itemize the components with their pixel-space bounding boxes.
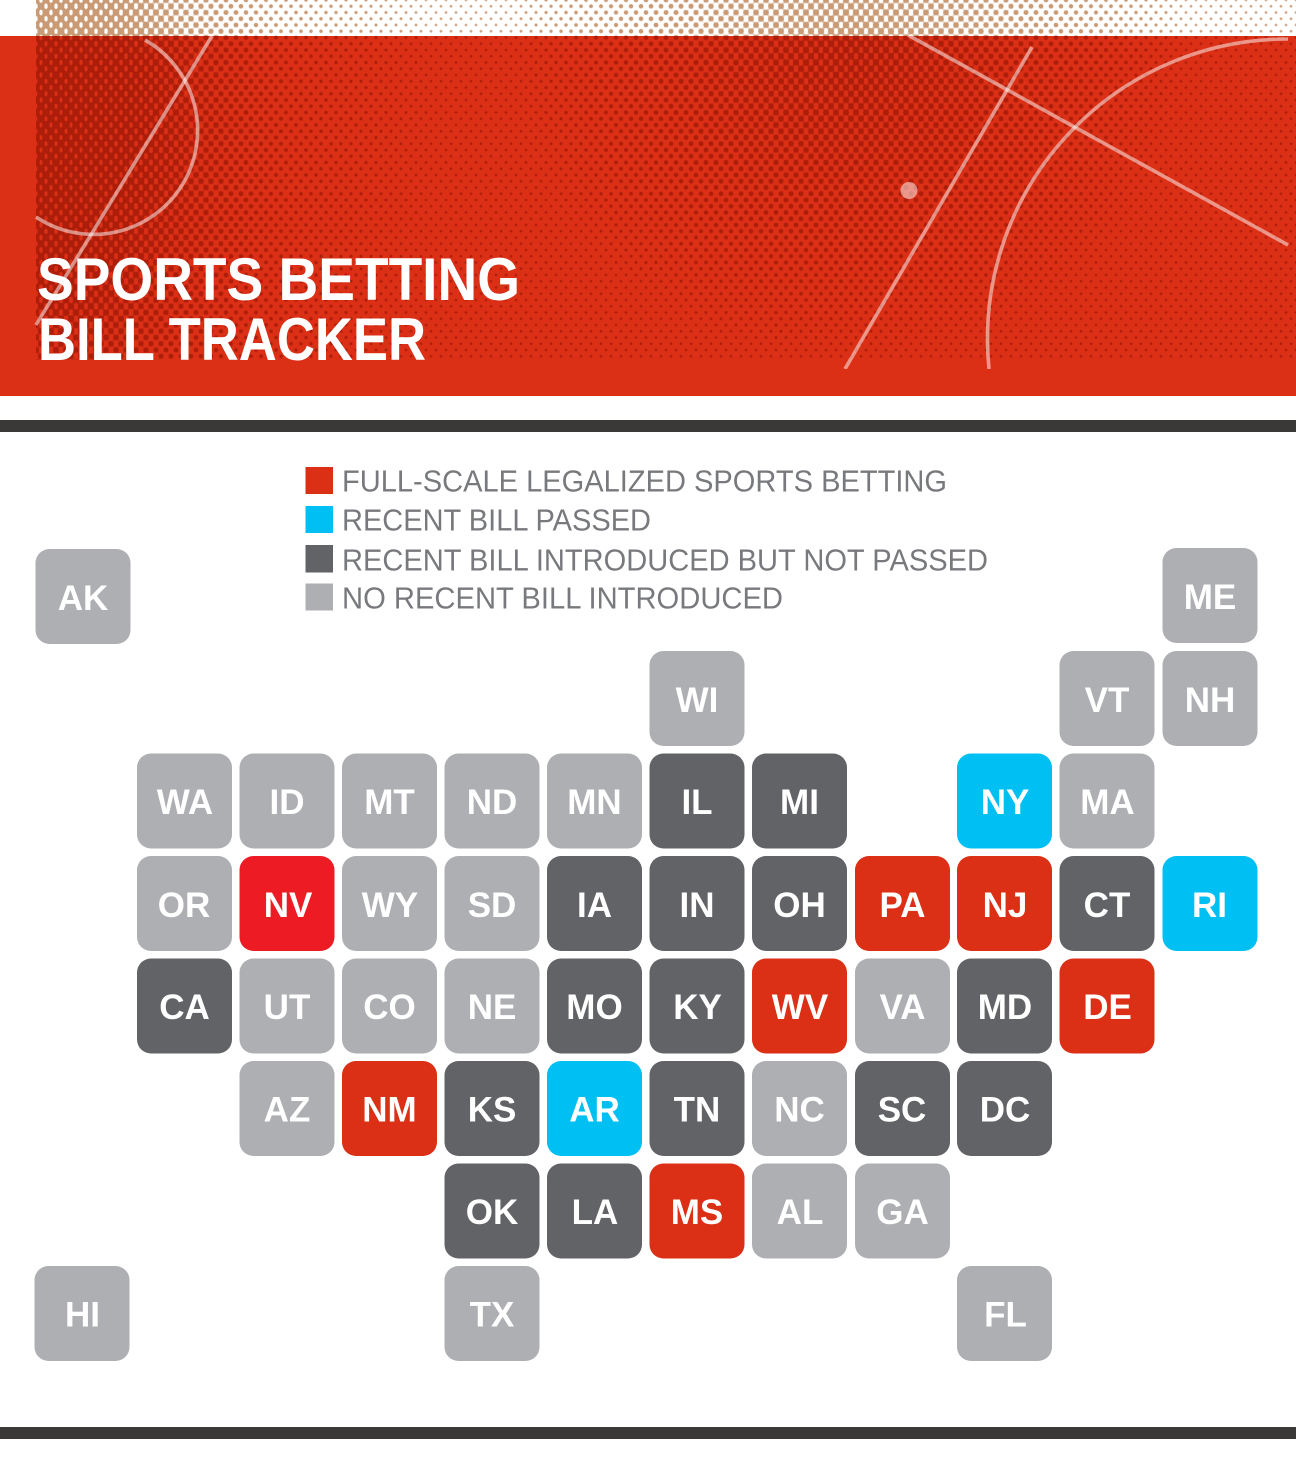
tile: MI: MI (780, 783, 819, 822)
tile: ND: ND (467, 783, 517, 822)
tile: NV (240, 856, 334, 951)
tile: CO: CO (363, 988, 416, 1027)
halftone dot texture (36, 0, 1296, 360)
tile: KS (444, 1061, 540, 1156)
tile: OH (752, 856, 847, 951)
state tile map (34, 548, 1258, 1361)
tile: VA (855, 958, 950, 1054)
tile: TX: TX (470, 1296, 515, 1334)
tile: VA: VA (879, 988, 926, 1027)
tile: GA (855, 1164, 950, 1258)
tile: DC: DC (980, 1090, 1030, 1130)
tile: MT (342, 754, 437, 848)
tile: NY (957, 754, 1052, 848)
tile: OK: OK (466, 1193, 518, 1232)
tile: NY: NY (981, 783, 1029, 822)
bottom divider bar (0, 1427, 1296, 1439)
tile: ID (240, 754, 334, 848)
tile: WA (137, 754, 232, 848)
title: BILL TRACKER (38, 306, 426, 373)
tile: HI: HI (65, 1296, 100, 1334)
tile: IA: IA (577, 886, 612, 925)
tile: OH: OH (773, 886, 826, 925)
court lines (36, 35, 1288, 369)
tile: LA (547, 1164, 642, 1258)
tile: NM: NM (362, 1090, 417, 1130)
tile: MI (752, 754, 847, 848)
tile: DC (957, 1061, 1052, 1156)
tile: OR (137, 856, 232, 951)
tile: IN (650, 856, 744, 951)
tile: SC: SC (878, 1090, 926, 1130)
tile: TN (650, 1061, 744, 1156)
tile: NJ: NJ (983, 886, 1027, 925)
tile: IN: IN (680, 886, 714, 925)
tile: NC: NC (774, 1090, 825, 1130)
legend item: recent bill passed: RECENT BILL PASSED (342, 502, 651, 538)
tile: AK (36, 549, 130, 644)
tile: AL: AL (777, 1193, 823, 1232)
tile: IL: IL (681, 783, 713, 822)
tile: LA: LA (572, 1193, 618, 1232)
tile: NJ (957, 856, 1052, 951)
top divider bar (0, 420, 1296, 432)
tile: UT (240, 958, 334, 1054)
tile: DE: DE (1083, 988, 1132, 1027)
tile: SD: SD (468, 886, 516, 925)
tile: CT: CT (1084, 886, 1130, 925)
tile: MD (957, 958, 1052, 1054)
tile: TN: TN (674, 1090, 720, 1130)
tile: MT: MT (364, 783, 415, 822)
tile: HI (34, 1266, 130, 1361)
title: SPORTS BETTING (37, 246, 520, 313)
tile: AZ (240, 1061, 334, 1156)
tile: NM (342, 1061, 437, 1156)
tile: PA: PA (879, 886, 926, 925)
tile: IA (547, 856, 642, 951)
tile: MA (1060, 754, 1154, 848)
tile: SD (444, 856, 540, 951)
tile: NC (752, 1061, 847, 1156)
tile: WV (752, 958, 847, 1054)
tile: AR (547, 1061, 642, 1156)
tile: TX (444, 1266, 540, 1361)
tile: FL: FL (984, 1296, 1027, 1334)
tile: KS: KS (468, 1090, 516, 1130)
tile: WY: WY (362, 886, 418, 925)
tile: AL (752, 1164, 847, 1258)
tile: ME (1162, 548, 1258, 643)
tile: FL (957, 1266, 1052, 1361)
tile: NH (1162, 651, 1258, 746)
tile: ND (444, 754, 540, 848)
tile: IL (650, 754, 744, 848)
header banner (0, 0, 1296, 396)
tile: WI: WI (676, 681, 718, 720)
tile: ME: ME (1184, 578, 1236, 617)
tile: CA: CA (159, 988, 210, 1027)
title (37, 246, 520, 373)
tile: AR: AR (569, 1090, 620, 1130)
tile: OK (444, 1164, 540, 1258)
tile: NE (444, 958, 540, 1054)
tile: SC (855, 1061, 950, 1156)
tile: PA (855, 856, 950, 951)
legend item: full-scale legalized: FULL-SCALE LEGALIZED SPORTS BETTING (342, 464, 947, 498)
tile: KY: KY (673, 988, 722, 1027)
tile: VT: VT (1085, 681, 1129, 720)
tile: RI (1162, 856, 1258, 951)
banner background (0, 36, 1296, 396)
tile: MA: MA (1080, 783, 1135, 822)
tile: OR: OR (158, 886, 210, 925)
tile: DE (1060, 958, 1154, 1054)
tile: UT: UT (264, 988, 310, 1027)
tile: WV: WV (772, 988, 829, 1027)
legend item: no recent bill: NO RECENT BILL INTRODUCED (342, 580, 783, 616)
tile: KY (650, 958, 744, 1054)
tile: MN: MN (567, 783, 622, 822)
tile: NH: NH (1185, 681, 1235, 720)
tile: MO: MO (566, 988, 623, 1027)
tile: CO (342, 958, 437, 1054)
tile: MS (650, 1164, 744, 1258)
court dot (900, 182, 918, 199)
tile: MO (547, 958, 642, 1054)
tile: WY (342, 856, 437, 951)
tile: NE: NE (468, 988, 516, 1027)
tile: AK: AK (58, 579, 108, 618)
tile: GA: GA (876, 1193, 929, 1232)
tile: CA (137, 958, 232, 1054)
tile: MD: MD (978, 988, 1032, 1027)
tile: AZ: AZ (264, 1090, 310, 1130)
tile: VT (1060, 651, 1154, 746)
legend (306, 464, 988, 616)
tile: CT (1060, 856, 1154, 951)
tile: WI (650, 651, 744, 746)
tile: WA: WA (157, 783, 213, 822)
tile: NV: NV (264, 886, 313, 925)
tile: ID: ID (270, 783, 304, 822)
legend item: introduced not passed: RECENT BILL INTRODUCED BUT NOT PASSED (342, 542, 988, 578)
tile: MS: MS (671, 1193, 723, 1232)
tile: MN (547, 754, 642, 848)
tile: RI: RI (1192, 886, 1227, 925)
